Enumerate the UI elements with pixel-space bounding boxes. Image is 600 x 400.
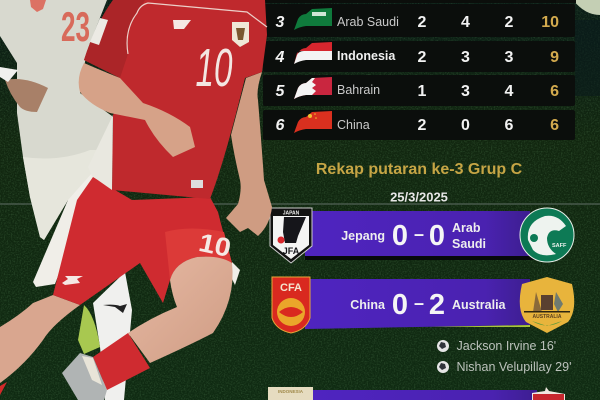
scorer: Nishan Velupillay: Nishan Velupillay 29' <box>456 360 571 374</box>
left leg <box>0 295 80 383</box>
match: Jepang vs Arab Saudi <box>270 208 574 263</box>
photo: white-kit opponent <box>0 0 132 400</box>
row: Bahrain <box>263 75 575 106</box>
date: 25/3/2025 <box>390 190 448 204</box>
row: Arab Saudi: 3 <box>276 14 285 31</box>
icon: Australia crest: AUSTRALIA <box>533 314 562 320</box>
icon: CFA crest <box>272 277 310 333</box>
match: China vs Australia: Australia <box>452 298 507 312</box>
row: Arab Saudi: 10 <box>541 14 559 31</box>
match: Jepang vs Arab Saudi: 0 <box>429 220 445 252</box>
match: Jepang vs Arab Saudi: Arab <box>452 221 481 235</box>
row: China: 6 <box>550 117 559 134</box>
opponent boot <box>78 305 100 354</box>
match: Indonesia vs Bahrain (cropped) <box>268 387 565 400</box>
row: Indonesia: 3 <box>505 49 514 66</box>
panel: standings table <box>260 0 576 140</box>
match: Jepang vs Arab Saudi: 0 <box>392 220 408 252</box>
row: Indonesia: 2 <box>418 49 427 66</box>
icon: SAFF crest: SAFF <box>552 243 567 249</box>
icon: Bahrain crest <box>532 387 565 400</box>
row: Indonesia <box>263 41 575 72</box>
match: Jepang vs Arab Saudi: – <box>414 224 424 244</box>
match: Jepang vs Arab Saudi: Saudi <box>452 237 486 251</box>
row: Bahrain: Bahrain <box>337 83 380 97</box>
row: Bahrain: 3 <box>461 83 470 100</box>
row: Bahrain: 5 <box>276 83 286 100</box>
ball corner <box>573 0 600 15</box>
row: Indonesia: 4 <box>275 49 285 66</box>
icon: Australia crest <box>520 277 574 333</box>
row: Bahrain: 1 <box>418 83 427 100</box>
icon: Indonesia crest <box>268 387 313 400</box>
row: China: 0 <box>461 117 470 134</box>
row: China: China <box>337 118 370 132</box>
row: China: 6 <box>276 117 285 134</box>
left forearm <box>79 63 195 157</box>
match: China vs Australia: 0 <box>392 289 408 321</box>
shorts white stripe <box>33 173 95 287</box>
opponent arm <box>5 79 48 112</box>
match: China vs Australia <box>272 277 574 333</box>
match: Jepang vs Arab Saudi: Jepang <box>341 229 385 243</box>
right leg <box>128 257 233 363</box>
row: Indonesia: 3 <box>461 49 470 66</box>
photo: white-kit opponent: 23 <box>61 3 90 50</box>
photo: Indonesia player: 10 <box>196 227 234 263</box>
boot <box>62 353 107 400</box>
row: Indonesia: 9 <box>550 49 559 66</box>
row: China: 2 <box>418 117 427 134</box>
row: Arab Saudi: 4 <box>461 14 470 31</box>
icon: Japan crest: JAPAN <box>283 210 300 216</box>
scorer: Jackson Irvine: Jackson Irvine 16' <box>456 339 556 353</box>
icon: Japan crest: JFA <box>283 246 300 256</box>
heading: recap: Rekap putaran ke-3 Grup C <box>316 161 523 178</box>
match: China vs Australia: – <box>414 293 424 313</box>
photo: Indonesia player <box>0 0 272 400</box>
row: Arab Saudi <box>263 4 575 37</box>
row: Arab Saudi: 2 <box>418 14 427 31</box>
photo: Indonesia player: 10 <box>196 38 232 98</box>
icon: SAFF crest <box>520 208 574 262</box>
right arm <box>226 72 272 236</box>
row: Indonesia: Indonesia <box>337 49 396 63</box>
shorts <box>53 177 232 305</box>
row: Bahrain: 6 <box>550 83 559 100</box>
icon: CFA crest: CFA <box>280 282 302 294</box>
row: China <box>263 110 575 140</box>
jersey <box>84 0 267 199</box>
icon: Indonesia crest: INDONESIA <box>278 389 304 394</box>
icon: Japan crest <box>270 208 312 263</box>
row: Bahrain: 4 <box>505 83 514 100</box>
match: China vs Australia: 2 <box>429 289 445 321</box>
row: Arab Saudi: 2 <box>505 14 514 31</box>
row: China: 6 <box>505 117 514 134</box>
match: China vs Australia: China <box>350 298 386 312</box>
row: Arab Saudi: Arab Saudi <box>337 15 399 29</box>
opponent sock <box>93 272 132 400</box>
sock <box>93 333 150 390</box>
